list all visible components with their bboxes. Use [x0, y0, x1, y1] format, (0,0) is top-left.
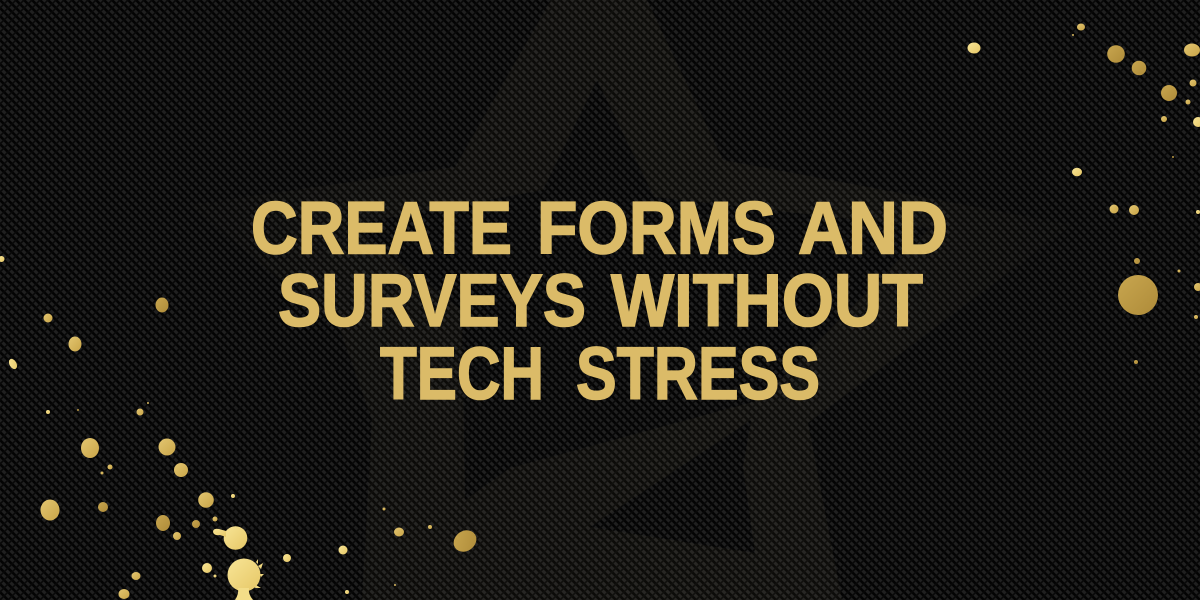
title: [251, 186, 948, 415]
title: STRESS: [576, 332, 820, 415]
title: CREATE: [251, 186, 512, 270]
title: SURVEYS: [278, 259, 586, 342]
title: AND: [798, 186, 948, 270]
title: TECH: [380, 332, 544, 415]
faint star watermark: [190, 0, 1072, 600]
gold splatter: bottom left: [0, 256, 291, 600]
title: FORMS: [537, 186, 776, 270]
gold splatter: top right: [968, 24, 1200, 176]
title: WITHOUT: [611, 259, 923, 342]
gold splatter: right: [1110, 204, 1200, 364]
gold splatter: bottom centre: [338, 508, 481, 594]
